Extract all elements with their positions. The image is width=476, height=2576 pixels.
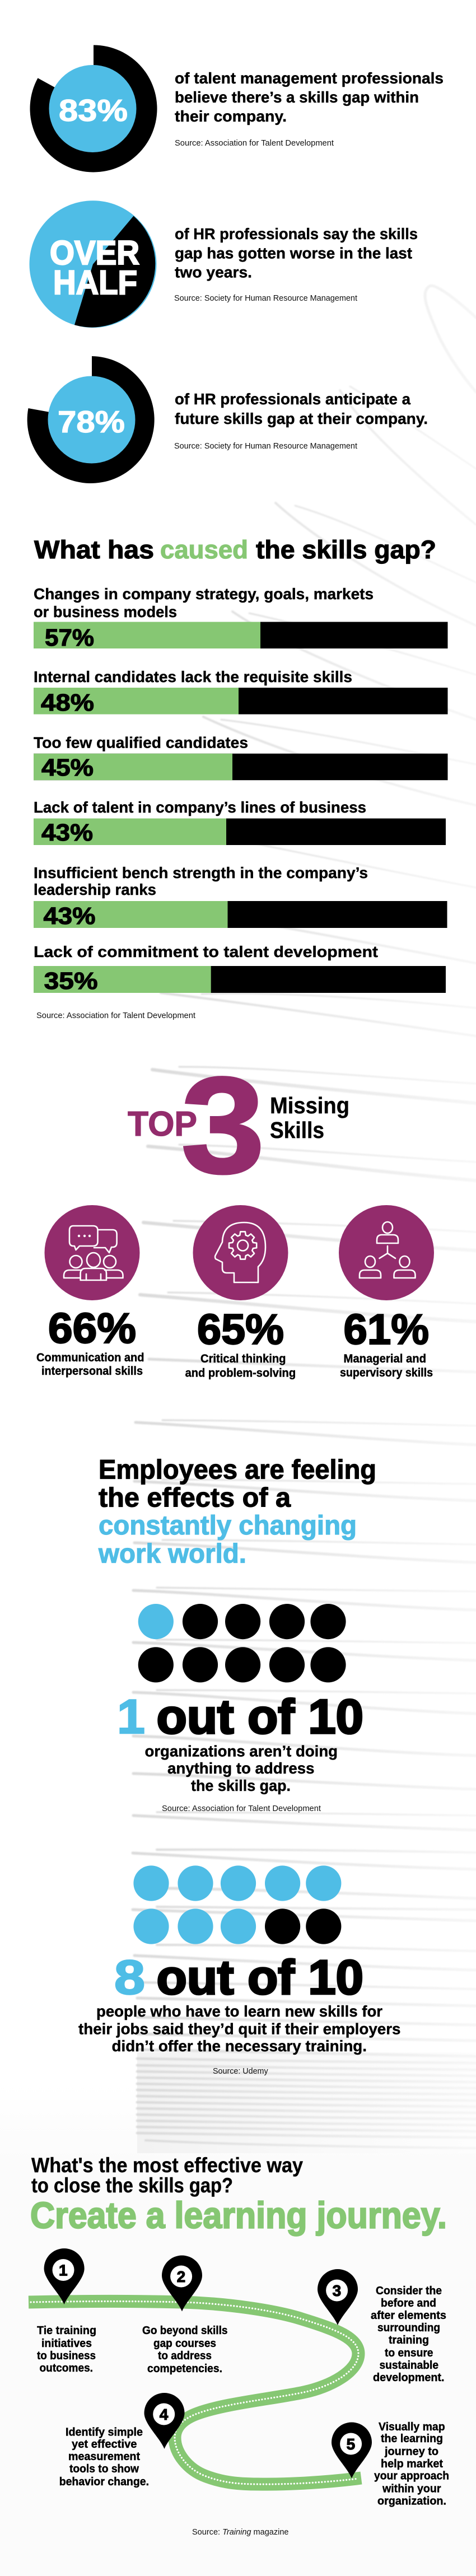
heading: what has caused the skills gap: What has [34,535,154,564]
description: gap has gotten worse in the last [175,244,412,262]
description: the skills gap. [191,1777,291,1794]
description: their company. [175,108,287,125]
description: believe there’s a skills gap within [175,88,419,106]
description: people who have to learn new skills for [96,2003,382,2020]
bar item: 48% [34,668,448,716]
pin 1: 1 [59,2261,68,2279]
source: training magazine: Source: Training magazine [192,2528,289,2537]
step 5 text: Visually map [379,2421,445,2433]
heading: create a learning journey: What's the most effective way [31,2154,303,2177]
bar item: 57% [34,585,448,651]
bar item: 35%: Lack of commitment to talent development [34,943,378,960]
step 2 text [142,2325,227,2375]
background: stacked plates [137,2052,476,2153]
source: Source: Association for Talent Development [36,1011,195,1020]
step 3 text: surrounding [377,2322,440,2334]
step 1 text: to business [37,2350,96,2362]
step 1 text: Tie training [37,2325,96,2337]
step 5 text: help market [381,2458,443,2470]
value: over half [50,234,139,301]
heading: what has caused the skills gap: the skills gap? [256,535,436,564]
description [78,2003,401,2055]
pin 4 [144,2393,185,2449]
road: winding green path [29,2302,361,2484]
step 4 text: behavior change. [59,2476,149,2488]
panel: communication skills [36,1205,144,1378]
heading: top 3 missing skills: Missing [270,1093,349,1118]
panel: 83% stat [30,45,444,172]
value: 1 out of 10: 1 [117,1690,145,1744]
panel: learning journey map [29,2248,449,2508]
source: Source: Association for Talent Development [175,139,334,148]
step 1 text [37,2325,96,2374]
background: lower tint [0,2083,476,2576]
description: anything to address [167,1760,315,1777]
heading: create a learning journey: Create a learning journey. [30,2194,447,2236]
description: organizations aren’t doing [144,1743,338,1760]
panel: managerial skills [339,1205,434,1379]
heading: employees are feeling the effects: Employees are feeling [99,1455,376,1485]
description: of HR professionals anticipate a [175,390,410,408]
pie chart: over half [29,200,157,328]
step 2 text: competencies. [147,2363,222,2375]
heading: top 3 missing skills: Skills [270,1117,324,1143]
icon: team hierarchy [339,1205,434,1300]
value: over half: HALF [53,264,137,301]
label: and problem-solving [185,1366,296,1380]
label: interpersonal skills [41,1365,143,1378]
label: Communication and [36,1351,144,1364]
bar item: 48%: Internal candidates lack the requisite skills [34,668,352,685]
step 3 text: after elements [371,2309,446,2322]
description: of HR professionals say the skills [175,225,418,242]
value: 61%: 61% [344,1306,429,1354]
label: Critical thinking [200,1352,286,1365]
step 3 text: training [389,2334,429,2346]
icon: head with gear [193,1205,288,1300]
step 5 text: journey to [384,2446,438,2458]
step 4 text: tools to show [69,2463,139,2475]
donut chart: 78% [27,356,155,483]
source: Source: Society for Human Resource Management [174,442,357,451]
pin 1 [44,2248,85,2304]
value: 8 out of 10: 8 [114,1951,145,2005]
description: two years. [175,263,252,281]
heading: employees are feeling the effects: the effects of a [99,1483,291,1513]
heading: top 3 missing skills: 3 [181,1048,265,1202]
step 1 text: outcomes. [39,2362,93,2374]
step 5 text: within your [382,2483,441,2495]
heading: employees are feeling the effects: work world. [98,1539,246,1569]
description: their jobs said they’d quit if their employers [78,2020,401,2037]
heading: what has caused the skills gap [34,535,436,564]
bar item: 43% leadership: 43% [44,903,95,930]
panel: 1 out of 10 [117,1604,363,1813]
label [340,1352,433,1379]
heading: top 3 missing skills [128,1048,349,1202]
description [175,390,428,427]
label [36,1351,144,1378]
bar item: 43% leadership [34,864,447,930]
pin 2: 2 [177,2268,185,2285]
value: 8 out of 10: out of 10 [157,1951,363,2005]
bar item: 43% leadership: leadership ranks [34,881,156,898]
panel: 8 out of 10 [78,1865,401,2076]
bar item: 43%: Lack of talent in company’s lines of business [34,799,366,816]
bar item: 57%: or business models [34,603,177,620]
source: Source: Society for Human Resource Management [174,294,357,303]
source: Source: Association for Talent Development [162,1804,321,1813]
value: 65%: 65% [197,1306,284,1354]
bar item: 45%: 45% [41,754,94,781]
step 2 text: to address [158,2350,212,2362]
pin 3: 3 [333,2282,341,2299]
description: didn’t offer the necessary training. [112,2037,367,2055]
panel: causes bar chart [34,585,448,1020]
bar item: 43% leadership: Insufficient bench strength in the company’s [34,864,368,881]
step 4 text: measurement [68,2451,140,2463]
dot chart: 8 of 10 [133,1865,341,1944]
pin 5 [332,2423,372,2479]
donut chart: 83% [30,45,157,172]
step 3 text: before and [381,2297,436,2309]
heading: top 3 missing skills: TOP [128,1105,197,1144]
icon: communication [45,1205,140,1300]
label: supervisory skills [340,1366,433,1379]
pin 3 [318,2269,358,2325]
bar item: 57%: Changes in company strategy, goals, markets [34,585,374,603]
bar item: 48%: 48% [41,689,94,716]
source: Source: Udemy [213,2067,268,2076]
description [175,225,418,281]
step 3 text: sustainable [380,2359,438,2372]
heading: create a learning journey: to close the skills gap? [31,2174,233,2197]
heading: employees are feeling the effects: constantly changing [99,1511,357,1541]
step 3 text: to ensure [385,2347,433,2359]
step 3 text: development. [373,2372,445,2384]
description [175,69,444,125]
description [144,1743,338,1794]
value: 78%: 78% [58,404,125,439]
pin 5: 5 [347,2435,355,2453]
step 5 text: the learning [381,2433,443,2445]
heading: what has caused the skills gap: caused [160,535,248,564]
value: 66%: 66% [48,1305,136,1352]
value: over half: OVER [50,234,139,272]
bar item: 43% [34,799,446,846]
heading: employees are feeling the effects [98,1455,376,1569]
step 2 text: Go beyond skills [142,2325,227,2337]
background: coil swooshes [133,286,476,2148]
step 4 text: Identify simple [66,2426,143,2438]
step 1 text: initiatives [41,2337,92,2350]
bar item: 45%: Too few qualified candidates [34,734,248,752]
bar item: 57%: 57% [45,624,94,651]
step 4 text [59,2426,149,2488]
value: 1 out of 10: out of 10 [157,1690,363,1744]
step 5 text: organization. [377,2495,446,2508]
description: future skills gap at their company. [175,410,428,427]
step 2 text: gap courses [153,2337,216,2350]
panel: over half stat [29,200,418,328]
value: 83%: 83% [59,93,128,128]
panel: 78% stat [27,356,428,483]
step 4 text: yet effective [72,2438,137,2451]
description: of talent management professionals [175,69,444,87]
bar item: 43%: 43% [41,819,93,846]
dot chart: 1 of 10 [138,1604,346,1682]
label [185,1352,296,1380]
step 3 text [371,2285,446,2384]
bar item: 35% [34,943,446,995]
pin 4: 4 [160,2406,169,2423]
label: Managerial and [344,1352,426,1365]
step 3 text: Consider the [376,2285,442,2297]
pin 2 [162,2256,202,2312]
panel: critical thinking skills [185,1205,296,1380]
step 5 text: your approach [374,2470,449,2482]
heading: create a learning journey [30,2154,447,2236]
step 5 text [374,2421,449,2508]
bar item: 35%: 35% [44,968,98,995]
bar item: 45% [34,734,448,781]
